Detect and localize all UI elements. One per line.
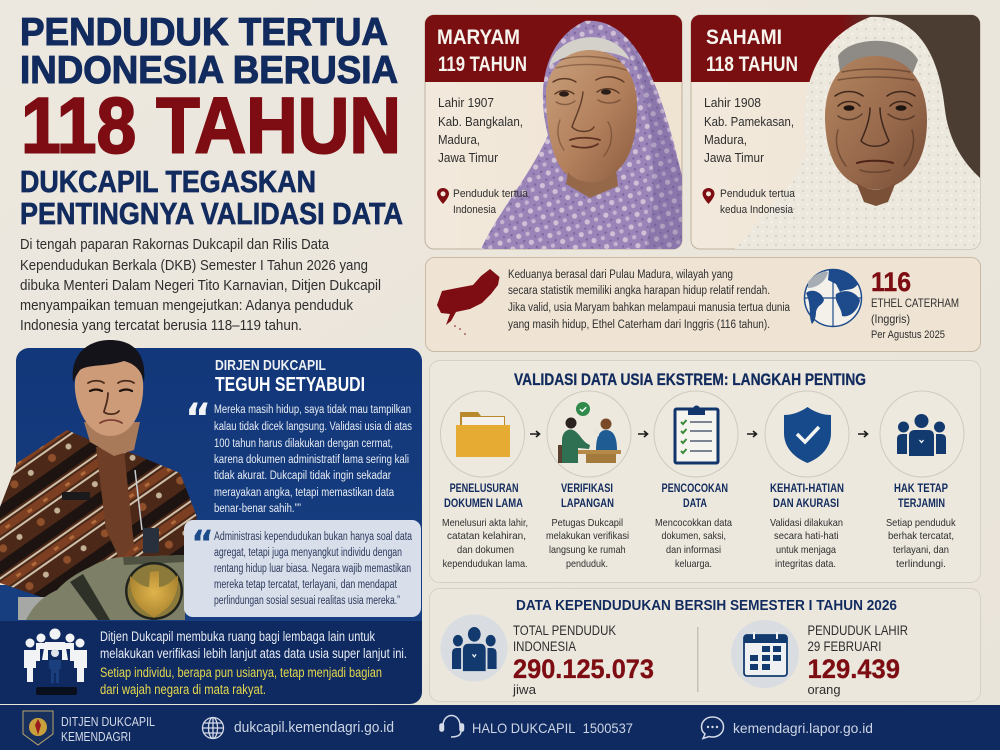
speaker name — [215, 357, 365, 396]
step 1 description: catatan kelahiran, — [447, 530, 526, 542]
second quote text: agregat, tetapi juga menyangkut individu dengan — [214, 547, 402, 559]
quote mark: “ — [191, 524, 214, 564]
maryam name: 119 TAHUN — [438, 53, 527, 76]
logo: kemendagri shield — [23, 711, 53, 745]
step 4 description: integritas data. — [775, 558, 836, 570]
footer bar — [0, 705, 1000, 750]
map: madura island — [437, 269, 500, 335]
second quote text: perlindungan sosial sesuai realitas usia mereka.” — [214, 595, 400, 607]
step 4 description: secara hati-hati — [774, 530, 839, 542]
card header and photo backdrop — [691, 15, 980, 178]
icon: website globe — [202, 718, 224, 738]
main headline block — [20, 11, 403, 334]
maryam details: Madura, — [438, 132, 480, 147]
maryam name: MARYAM — [437, 26, 520, 49]
step 5 — [880, 391, 964, 570]
panel: sahami profile card — [691, 15, 980, 249]
stat: world record 116 — [871, 267, 959, 341]
context text — [508, 269, 791, 331]
maryam name — [437, 26, 527, 76]
step 4 label: DAN AKURASI — [773, 496, 839, 510]
stat: total population: INDONESIA — [513, 639, 576, 654]
step 1 description: dan dokumen — [457, 544, 514, 556]
maryam details — [438, 95, 523, 165]
step 3 description — [655, 517, 732, 570]
stat: world record 116: Per Agustus 2025 — [871, 329, 945, 341]
panel: validation steps — [430, 360, 980, 582]
step 1 label — [444, 481, 523, 510]
step 2 description: penduduk. — [566, 558, 608, 570]
sahami caption: Penduduk tertua — [720, 188, 796, 200]
verification text: melakukan verifikasi lebih lanjut atas data usia super lanjut ini. — [100, 646, 407, 661]
second quote text — [214, 531, 412, 607]
step 1 description: kependudukan lama. — [443, 558, 528, 570]
emblem: garuda — [125, 562, 183, 620]
icon: globe — [804, 270, 862, 326]
step 2 description: langsung ke rumah — [549, 544, 626, 556]
arrow — [530, 431, 540, 437]
subtitle — [20, 165, 403, 231]
step 3 label: DATA — [683, 496, 707, 510]
sahami name: 118 TAHUN — [706, 53, 798, 76]
arrow — [747, 431, 756, 437]
maryam details: Lahir 1907 — [438, 95, 494, 110]
first quote text: kalau tidak dicek langsung. Validasi usia di atas — [214, 421, 412, 433]
sahami details: Lahir 1908 — [704, 95, 761, 110]
first quote text — [214, 404, 412, 515]
step 4 label — [770, 481, 844, 510]
intro paragraph — [20, 237, 381, 334]
icon: field verification — [547, 391, 631, 477]
complaint portal: kemendagri.lapor.go.id — [733, 720, 873, 736]
website address: dukcapil.kemendagri.go.id — [234, 719, 394, 736]
subtitle: DUKCAPIL TEGASKAN — [20, 165, 316, 199]
highlighted statement: Setiap individu, berapa pun usianya, tetap menjadi bagian — [100, 665, 382, 680]
step 4 description: untuk menjaga — [776, 544, 836, 556]
step 1 label: PENELUSURAN — [450, 481, 519, 495]
first quote text: Mereka masih hidup, saya tidak mau tampilkan — [214, 404, 411, 416]
organisation name: KEMENDAGRI — [61, 729, 131, 744]
step 2 label — [561, 481, 614, 510]
step 2 description — [546, 517, 629, 570]
panel: maryam profile card — [425, 15, 682, 249]
sahami name: SAHAMI — [706, 26, 782, 49]
context text: yang masih hidup, Ethel Caterham dari Inggris (116 tahun). — [508, 319, 770, 331]
step 4 label: KEHATI-HATIAN — [770, 481, 844, 495]
stat: leap day births: PENDUDUK LAHIR — [808, 623, 908, 638]
step 5 label: TERJAMIN — [898, 496, 945, 510]
speaker name: DIRJEN DUKCAPIL — [215, 357, 326, 374]
icon: protected people — [880, 391, 964, 477]
maryam caption: Penduduk tertua — [453, 188, 529, 200]
icon: shield — [765, 391, 849, 477]
stat: total population: TOTAL PENDUDUK — [513, 623, 616, 638]
title: 118 tahun: 118 TAHUN — [21, 80, 401, 170]
intro paragraph: menyampaikan temuan mengejutkan: Adanya penduduk — [20, 298, 354, 314]
icon: calendar — [731, 620, 799, 688]
highlighted statement — [100, 665, 382, 697]
organisation name — [61, 714, 155, 744]
first quote text: benar-benar sahih.”” — [214, 503, 301, 515]
quote mark: “ — [185, 396, 211, 442]
icon: location pin — [702, 188, 714, 204]
second quote text: rentang hidup luar biasa. Negara wajib memastikan — [214, 563, 411, 575]
step 3 description: dokumen, saksi, — [662, 530, 726, 542]
speaker name: TEGUH SETYABUDI — [215, 374, 365, 396]
step 2 description: Petugas Dukcapil — [552, 517, 623, 529]
icon: population — [440, 614, 508, 682]
maryam caption — [453, 188, 529, 216]
step 3 label — [662, 481, 728, 510]
sahami name — [706, 26, 798, 76]
step 2 label: VERIFIKASI — [561, 481, 613, 495]
stat: total population: jiwa — [512, 682, 537, 697]
step 1 description: Menelusuri akta lahir, — [442, 517, 528, 529]
highlighted statement: dari wajah negara di mata rakyat. — [100, 682, 266, 697]
maryam details: Jawa Timur — [438, 150, 499, 165]
stat: leap day births: 129.439 — [808, 654, 900, 684]
helpline: HALO DUKCAPIL 1500537 — [472, 720, 633, 736]
step 5 description: Setiap penduduk — [886, 517, 956, 529]
first quote text: karena dokumen administratif lama sering kali — [214, 454, 409, 466]
intro paragraph: Di tengah paparan Rakornas Dukcapil dan Rilis Data — [20, 237, 330, 253]
sahami details: Kab. Pamekasan, — [704, 114, 794, 129]
sahami details — [704, 95, 794, 165]
intro paragraph: dibuka Menteri Dalam Negeri Tito Karnavian, Ditjen Dukcapil — [20, 278, 381, 294]
photo: teguh setyabudi at podium — [0, 340, 197, 620]
organisation name: DITJEN DUKCAPIL — [61, 714, 155, 729]
portrait: sahami — [735, 17, 980, 249]
step 2 label: LAPANGAN — [561, 496, 614, 510]
validation heading: VALIDASI DATA USIA EKSTREM: LANGKAH PENTING — [514, 370, 866, 389]
context text: secara statistik memiliki angka harapan hidup relatif rendah. — [508, 285, 770, 297]
step 5 description: berhak tercatat, — [888, 530, 954, 542]
sahami caption: kedua Indonesia — [720, 204, 794, 216]
context text: Keduanya berasal dari Pulau Madura, wilayah yang — [508, 269, 733, 281]
stat: leap day births: orang — [808, 682, 840, 697]
step 4 description: Validasi dilakukan — [770, 517, 843, 529]
step 5 label: HAK TETAP — [894, 481, 948, 495]
step 3 description: dan informasi — [666, 544, 721, 556]
context text: Jika valid, usia Maryam bahkan melampaui manusia tertua dunia — [508, 302, 791, 314]
stat: total population — [512, 623, 654, 697]
step 3 label: PENCOCOKAN — [662, 481, 728, 495]
icon: folder — [440, 391, 524, 477]
verification text — [100, 629, 407, 661]
icon: headset — [440, 716, 464, 737]
title: penduduk tertua: PENDUDUK TERTUA — [20, 11, 388, 54]
step 3 description: keluarga. — [675, 558, 712, 570]
step 2 description: melakukan verifikasi — [546, 530, 629, 542]
intro paragraph: Indonesia yang tercatat berusia 118–119 tahun. — [20, 318, 302, 334]
second quote text: mereka tetap tercatat, terlayani, dan mendapat — [214, 579, 398, 591]
data heading: DATA KEPENDUDUKAN BERSIH SEMESTER I TAHUN 2026 — [516, 597, 897, 614]
stat: leap day births — [808, 623, 908, 697]
step 5 description: terlayani, dan — [893, 544, 949, 556]
card header band — [425, 15, 682, 82]
panel: madura and world record context — [426, 258, 980, 352]
step 5 label — [894, 481, 948, 510]
sahami details: Madura, — [704, 132, 747, 147]
step 3 — [654, 391, 738, 570]
second quote text: Administrasi kependudukan bukan hanya soal data — [214, 531, 412, 543]
panel: verification note — [0, 621, 422, 704]
first quote text: merayakan angka, tetapi memastikan data — [214, 487, 395, 499]
title: penduduk tertua — [20, 11, 398, 92]
sahami caption — [720, 188, 796, 216]
step 4 — [765, 391, 849, 570]
icon: location pin — [437, 188, 449, 204]
sahami details: Jawa Timur — [704, 150, 765, 165]
intro paragraph: Kependudukan Berkala (DKB) Semester I Tahun 2026 yang — [20, 258, 368, 274]
panel: clean population data — [430, 588, 980, 702]
stat: world record 116: 116 — [871, 267, 911, 297]
panel: dirjen quote — [0, 340, 422, 638]
verification text: Ditjen Dukcapil membuka ruang bagi lembaga lain untuk — [100, 629, 375, 644]
step 1 — [440, 391, 528, 570]
stat: world record 116: ETHEL CATERHAM — [871, 296, 959, 310]
icon: people group — [24, 628, 87, 695]
step 5 description — [886, 517, 956, 570]
stat: world record 116: (Inggris) — [871, 312, 910, 326]
step 1 label: DOKUMEN LAMA — [444, 496, 523, 510]
portrait: maryam — [481, 21, 682, 249]
maryam details: Kab. Bangkalan, — [438, 114, 523, 129]
second quote box — [184, 520, 421, 617]
title: penduduk tertua: INDONESIA BERUSIA — [20, 49, 398, 92]
first quote text: 100 tahun harus dilakukan dengan cermat, — [214, 438, 393, 450]
arrow — [638, 431, 648, 437]
facial features — [835, 69, 915, 172]
icon: chat bubble — [702, 717, 724, 738]
subtitle: PENTINGNYA VALIDASI DATA — [20, 197, 403, 231]
arrow — [858, 431, 868, 437]
facial features — [553, 56, 626, 156]
first quote text: tidak akurat. Dukcapil tidak ingin sekadar — [214, 470, 391, 482]
step 4 description — [770, 517, 843, 570]
stat: leap day births: 29 FEBRUARI — [808, 639, 882, 654]
step 1 description — [442, 517, 528, 570]
step 5 description: terlindungi. — [896, 558, 946, 570]
step 3 description: Mencocokkan data — [655, 517, 732, 529]
step 2 — [546, 391, 631, 570]
maryam caption: Indonesia — [453, 204, 497, 216]
stat: total population: 290.125.073 — [513, 654, 654, 684]
icon: clipboard checklist — [654, 391, 738, 477]
